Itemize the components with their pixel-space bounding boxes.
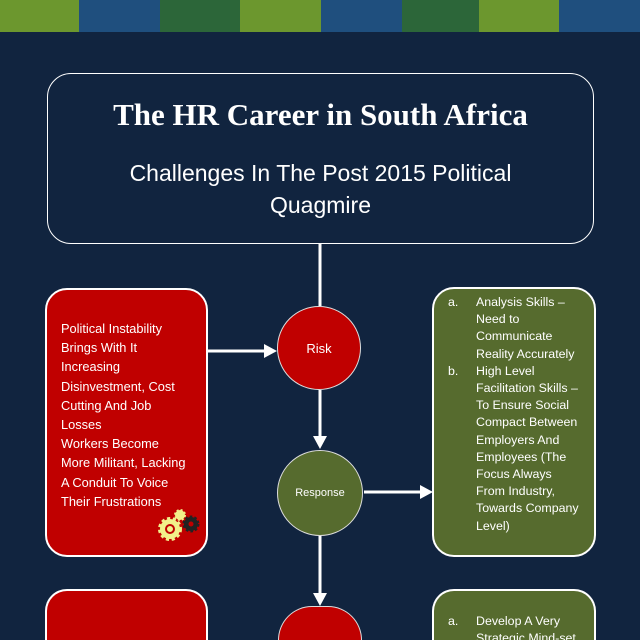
panel: response skills: b. xyxy=(448,364,458,378)
circle: Response xyxy=(277,450,363,536)
panel: risk description: Political Instability Brings With It Increasing Disinvestment, Cost Cutting And Job Losses xyxy=(61,321,175,432)
subtitle: Challenges In The Post 2015 Political xyxy=(130,160,511,186)
panel: risk description xyxy=(45,288,208,557)
subtitle: Quagmire xyxy=(270,192,371,218)
title: The HR Career in South Africa xyxy=(113,97,528,132)
panel: response skills: a. xyxy=(448,295,458,309)
top color stripe xyxy=(0,0,640,32)
circle: second red xyxy=(278,606,362,640)
circle: Risk xyxy=(277,306,361,390)
panel: response skills: High Level Facilitation Skills – To Ensure Social Compact Between Employers And Employees (The Focus Always From Industry, Towards Company Level) xyxy=(476,364,579,533)
panel: second green box: a. xyxy=(448,614,458,628)
circle: Risk: Risk xyxy=(306,340,332,356)
subtitle xyxy=(130,160,511,218)
panel: second green box xyxy=(432,589,596,640)
panel: response skills: Analysis Skills – Need to Communicate Reality Accurately xyxy=(476,295,574,361)
title box xyxy=(47,73,594,244)
panel: risk description: Workers Become More Militant, Lacking A Conduit To Voice Their Frustrations xyxy=(61,436,185,509)
panel: second red box xyxy=(45,589,208,640)
icon: gears xyxy=(158,509,200,541)
panel: response skills xyxy=(432,287,596,557)
circle: Response: Response xyxy=(295,487,345,499)
